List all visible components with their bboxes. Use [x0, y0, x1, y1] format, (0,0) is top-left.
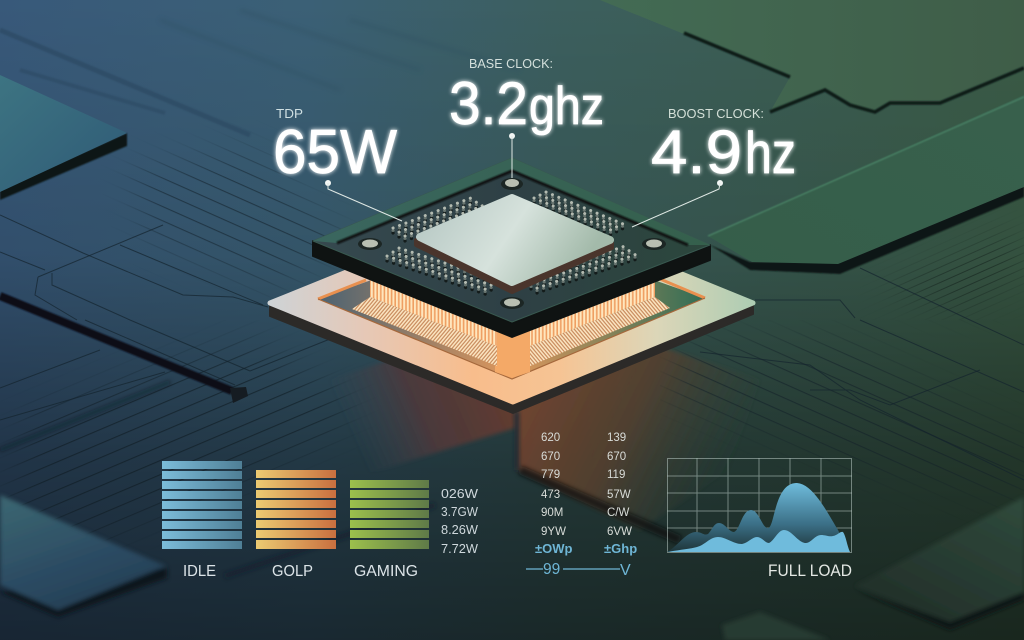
wattage column: 3.7GW: [441, 505, 478, 519]
panel: right plate: [708, 95, 1024, 274]
table summary row: [526, 541, 637, 579]
wattage column: 7.72W: [441, 542, 478, 556]
number table: 119: [607, 469, 625, 481]
glowing contact pins: [352, 278, 670, 378]
processor illustration: [270, 158, 753, 413]
table summary row: ±Ghp: [604, 541, 637, 556]
pin rows on package: [387, 192, 637, 295]
callout: base clock: 3.2: [449, 70, 528, 137]
panel: bottom centre plate: [722, 612, 830, 640]
callout: boost clock: BOOST CLOCK:: [668, 107, 764, 121]
area chart: full load: FULL LOAD: [768, 562, 852, 580]
callout: base clock: BASE CLOCK:: [469, 57, 553, 71]
wattage column: 8.26W: [441, 523, 478, 537]
heat spreader: [416, 198, 612, 292]
number table: 57W: [607, 489, 631, 501]
wattage column: 026W: [441, 487, 478, 501]
bar group: idle: IDLE: [183, 563, 216, 580]
dark shadow bands on board: [0, 382, 680, 576]
callout: TDP: TDP: [276, 107, 303, 121]
table summary row: 99: [543, 561, 560, 578]
number table: 670: [541, 451, 560, 463]
panel: bottom right plate: [855, 497, 1024, 630]
bar group: golp: [256, 470, 336, 580]
table summary row: ±OWp: [535, 541, 573, 556]
table summary row: V: [620, 562, 631, 579]
number table: C/W: [607, 507, 630, 519]
number table: 620: [541, 432, 560, 444]
callout: boost clock: 4.9: [651, 118, 742, 186]
bar group: golp: GOLP: [272, 563, 313, 580]
number table: 139: [607, 432, 626, 444]
panel: bottom left plate: [0, 495, 167, 617]
panel: top right plate: [600, 0, 1024, 112]
bar group: gaming: [350, 480, 429, 580]
number table: 9YW: [541, 526, 566, 538]
callout: boost clock: hz: [745, 121, 796, 186]
callout: TDP: [273, 107, 402, 221]
CPU package: [313, 158, 710, 337]
bar group: idle: [162, 461, 242, 580]
number table: 670: [607, 451, 626, 463]
panel: dark strip: [0, 296, 248, 403]
number table: [541, 432, 632, 538]
bar group: gaming: GAMING: [354, 563, 418, 580]
number table: 779: [541, 469, 560, 481]
callout: TDP: 65W: [273, 118, 397, 187]
callout: base clock: ghz: [529, 77, 604, 136]
wattage column: [441, 487, 478, 556]
socket base plate: [270, 205, 753, 413]
panel: top left plate: [0, 75, 127, 200]
area chart: full load: [667, 458, 852, 580]
mounting screws: [358, 178, 666, 309]
number table: 473: [541, 489, 560, 501]
callout: boost clock: [632, 107, 796, 227]
callout: base clock: [449, 57, 604, 178]
number table: 6VW: [607, 526, 632, 538]
number table: 90M: [541, 507, 563, 519]
